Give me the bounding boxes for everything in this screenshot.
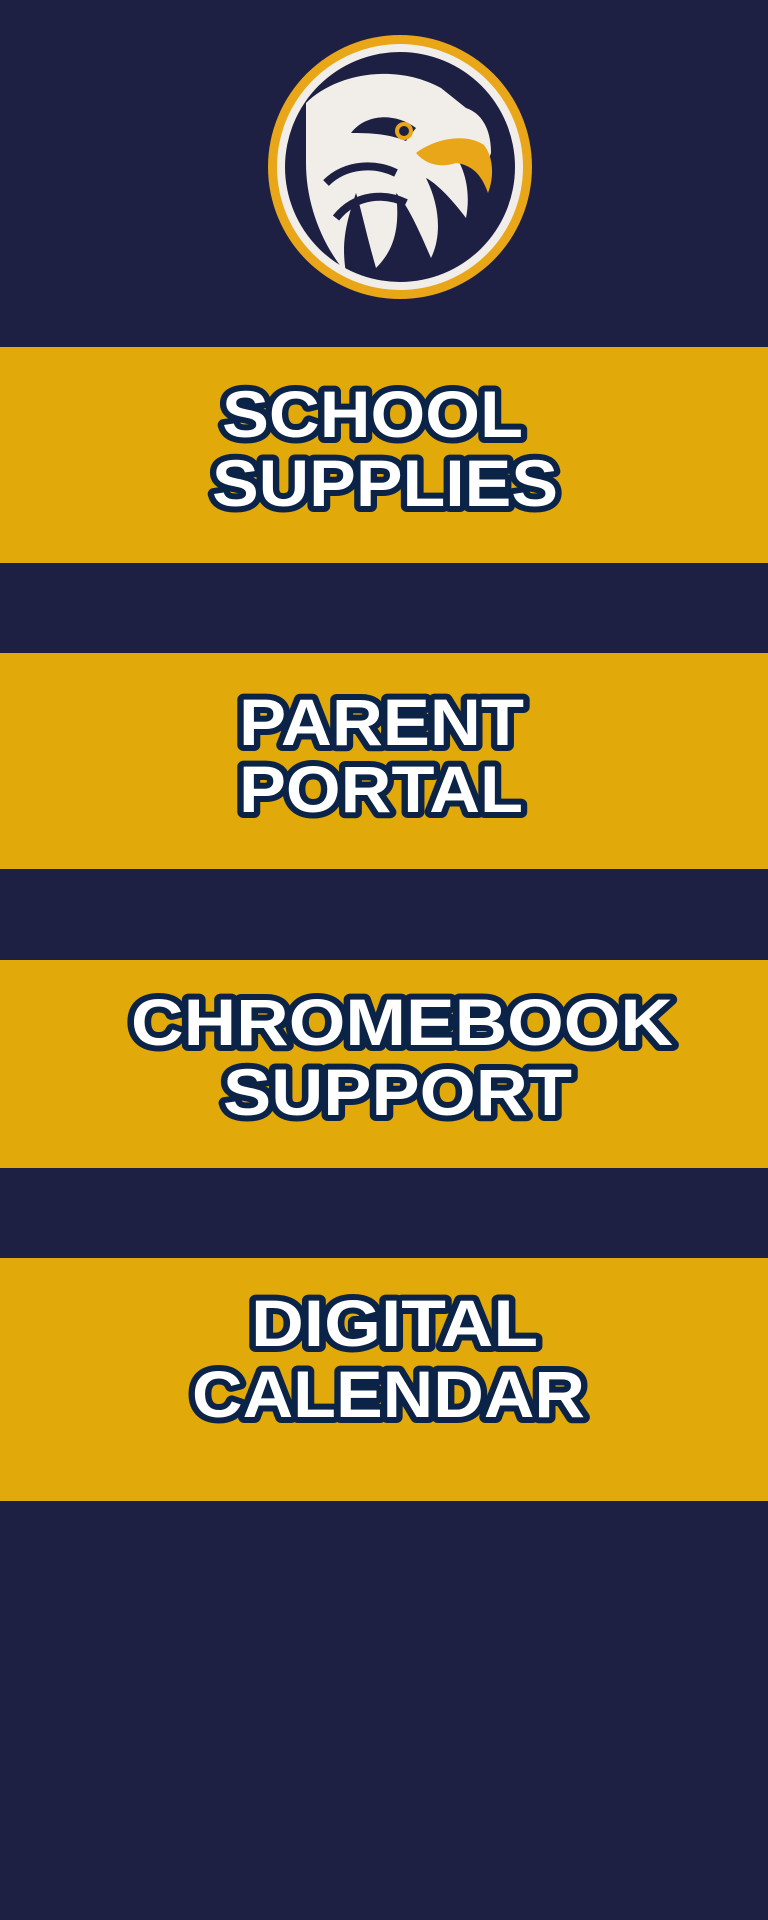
band: parent portal	[0, 653, 768, 869]
heading: digital calendar: CALENDAR	[192, 1357, 585, 1431]
heading: parent portal: PARENT	[239, 685, 524, 759]
heading: digital calendar	[188, 1286, 590, 1431]
heading: digital calendar: DIGITAL	[251, 1286, 538, 1360]
heading: parent portal: PORTAL	[239, 752, 523, 826]
eagle head	[306, 74, 492, 273]
heading: parent portal	[237, 685, 530, 826]
band: digital calendar	[0, 1258, 768, 1501]
heading: chromebook support	[127, 985, 679, 1129]
logo: eagle emblem	[268, 35, 532, 299]
heading: school supplies: SCHOOL	[222, 377, 523, 451]
heading: school supplies	[208, 377, 562, 520]
band: chromebook support	[0, 960, 768, 1168]
band: school supplies	[0, 347, 768, 563]
heading: chromebook support: SUPPORT	[223, 1055, 572, 1129]
heading: school supplies: SUPPLIES	[212, 446, 558, 520]
heading: chromebook support: CHROMEBOOK	[131, 985, 673, 1059]
